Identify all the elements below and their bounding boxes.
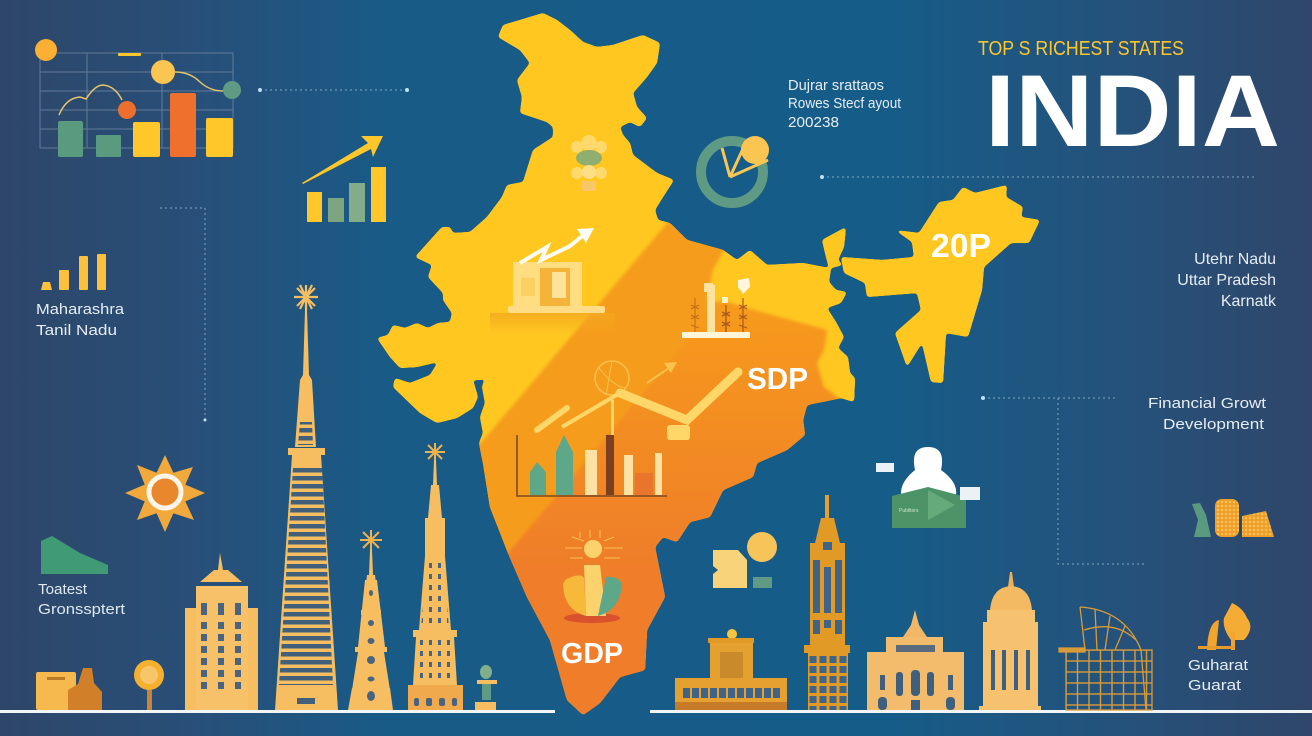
chart line	[537, 361, 738, 440]
text block: Maharashtra and Tamil Nadu	[36, 301, 125, 339]
building: glass arch frame	[1059, 607, 1152, 710]
icon: green box with white cloud: Publiters	[899, 508, 919, 514]
chart: top-left bars with line overlay	[35, 39, 241, 157]
icon: gold stacks	[1192, 499, 1274, 537]
building: spired tower	[408, 443, 463, 710]
icon: rising bars with arrow	[302, 136, 386, 222]
building: palace	[867, 610, 964, 710]
text block: top centre note	[788, 77, 902, 131]
text block: right states list: Uttar Pradesh	[1177, 272, 1276, 289]
icon: national emblem	[571, 135, 607, 191]
icon: bulb	[134, 660, 164, 710]
text block: bottom left	[38, 581, 126, 618]
text block: bottom left: Gronssptert	[38, 601, 126, 618]
text block: Gujarat: Guharat	[1188, 657, 1249, 674]
building: low civic hall	[675, 629, 787, 710]
icon: sun badge	[125, 455, 205, 532]
building: domed capitol	[979, 572, 1041, 710]
text block: top centre note: Rowes Stecf ayout	[788, 95, 902, 112]
text block: top centre note: 200238	[788, 114, 839, 131]
icon: green hill	[41, 536, 108, 574]
text block: right states list: Utehr Nadu	[1194, 251, 1276, 268]
map: north-east region	[841, 185, 1040, 383]
icon: economic growth line and chart	[517, 361, 738, 496]
text block: right states list: Karnatk	[1221, 293, 1277, 310]
icon: box and cluster	[36, 668, 102, 710]
text block: financial growth	[1148, 395, 1267, 433]
building: clock tower	[804, 495, 850, 710]
label: GDP: GDP	[561, 638, 623, 670]
text block: top centre note: Dujrar srattaos	[788, 77, 884, 94]
icon: clock	[701, 136, 769, 203]
icon: factory with rising arrow	[490, 228, 615, 335]
icon: green box with white cloud	[876, 447, 980, 528]
ground line right	[650, 710, 1312, 713]
label: SDP: SDP	[747, 361, 808, 396]
ground line left	[0, 710, 555, 713]
text block: Gujarat: Guarat	[1188, 677, 1242, 694]
icon: small statue	[475, 665, 497, 710]
icon: lightbulb lotus	[563, 530, 623, 623]
text block: financial growth: Financial Growt	[1148, 395, 1267, 412]
text block: bottom left: Toatest	[38, 581, 88, 598]
text block: financial growth: Development	[1163, 416, 1265, 433]
text block: right states list	[1177, 251, 1277, 310]
text block: Maharashtra and Tamil Nadu: Maharashra	[36, 301, 125, 318]
connector lines	[160, 90, 1255, 564]
icon: agriculture with pillar and plants	[682, 278, 750, 338]
connector dots	[204, 88, 985, 422]
icon: tree and figure	[1198, 603, 1250, 650]
heading: subtitle: TOP S RICHEST STATES	[978, 38, 1184, 60]
text block: Maharashtra and Tamil Nadu: Tanil Nadu	[36, 322, 117, 339]
icon: small rising bars	[41, 254, 106, 290]
building: tall tapered tower	[275, 285, 338, 710]
icon: gold box, gear and green tile	[713, 532, 777, 588]
map of India	[377, 13, 1040, 730]
bar chart	[517, 435, 667, 496]
text block: Gujarat	[1188, 657, 1249, 694]
label: 20P: 20P	[931, 227, 991, 264]
heading: title: INDIA	[985, 54, 1280, 168]
building: office block	[185, 553, 258, 710]
map: main peninsula and north	[377, 13, 860, 730]
building: steeple	[348, 530, 393, 710]
